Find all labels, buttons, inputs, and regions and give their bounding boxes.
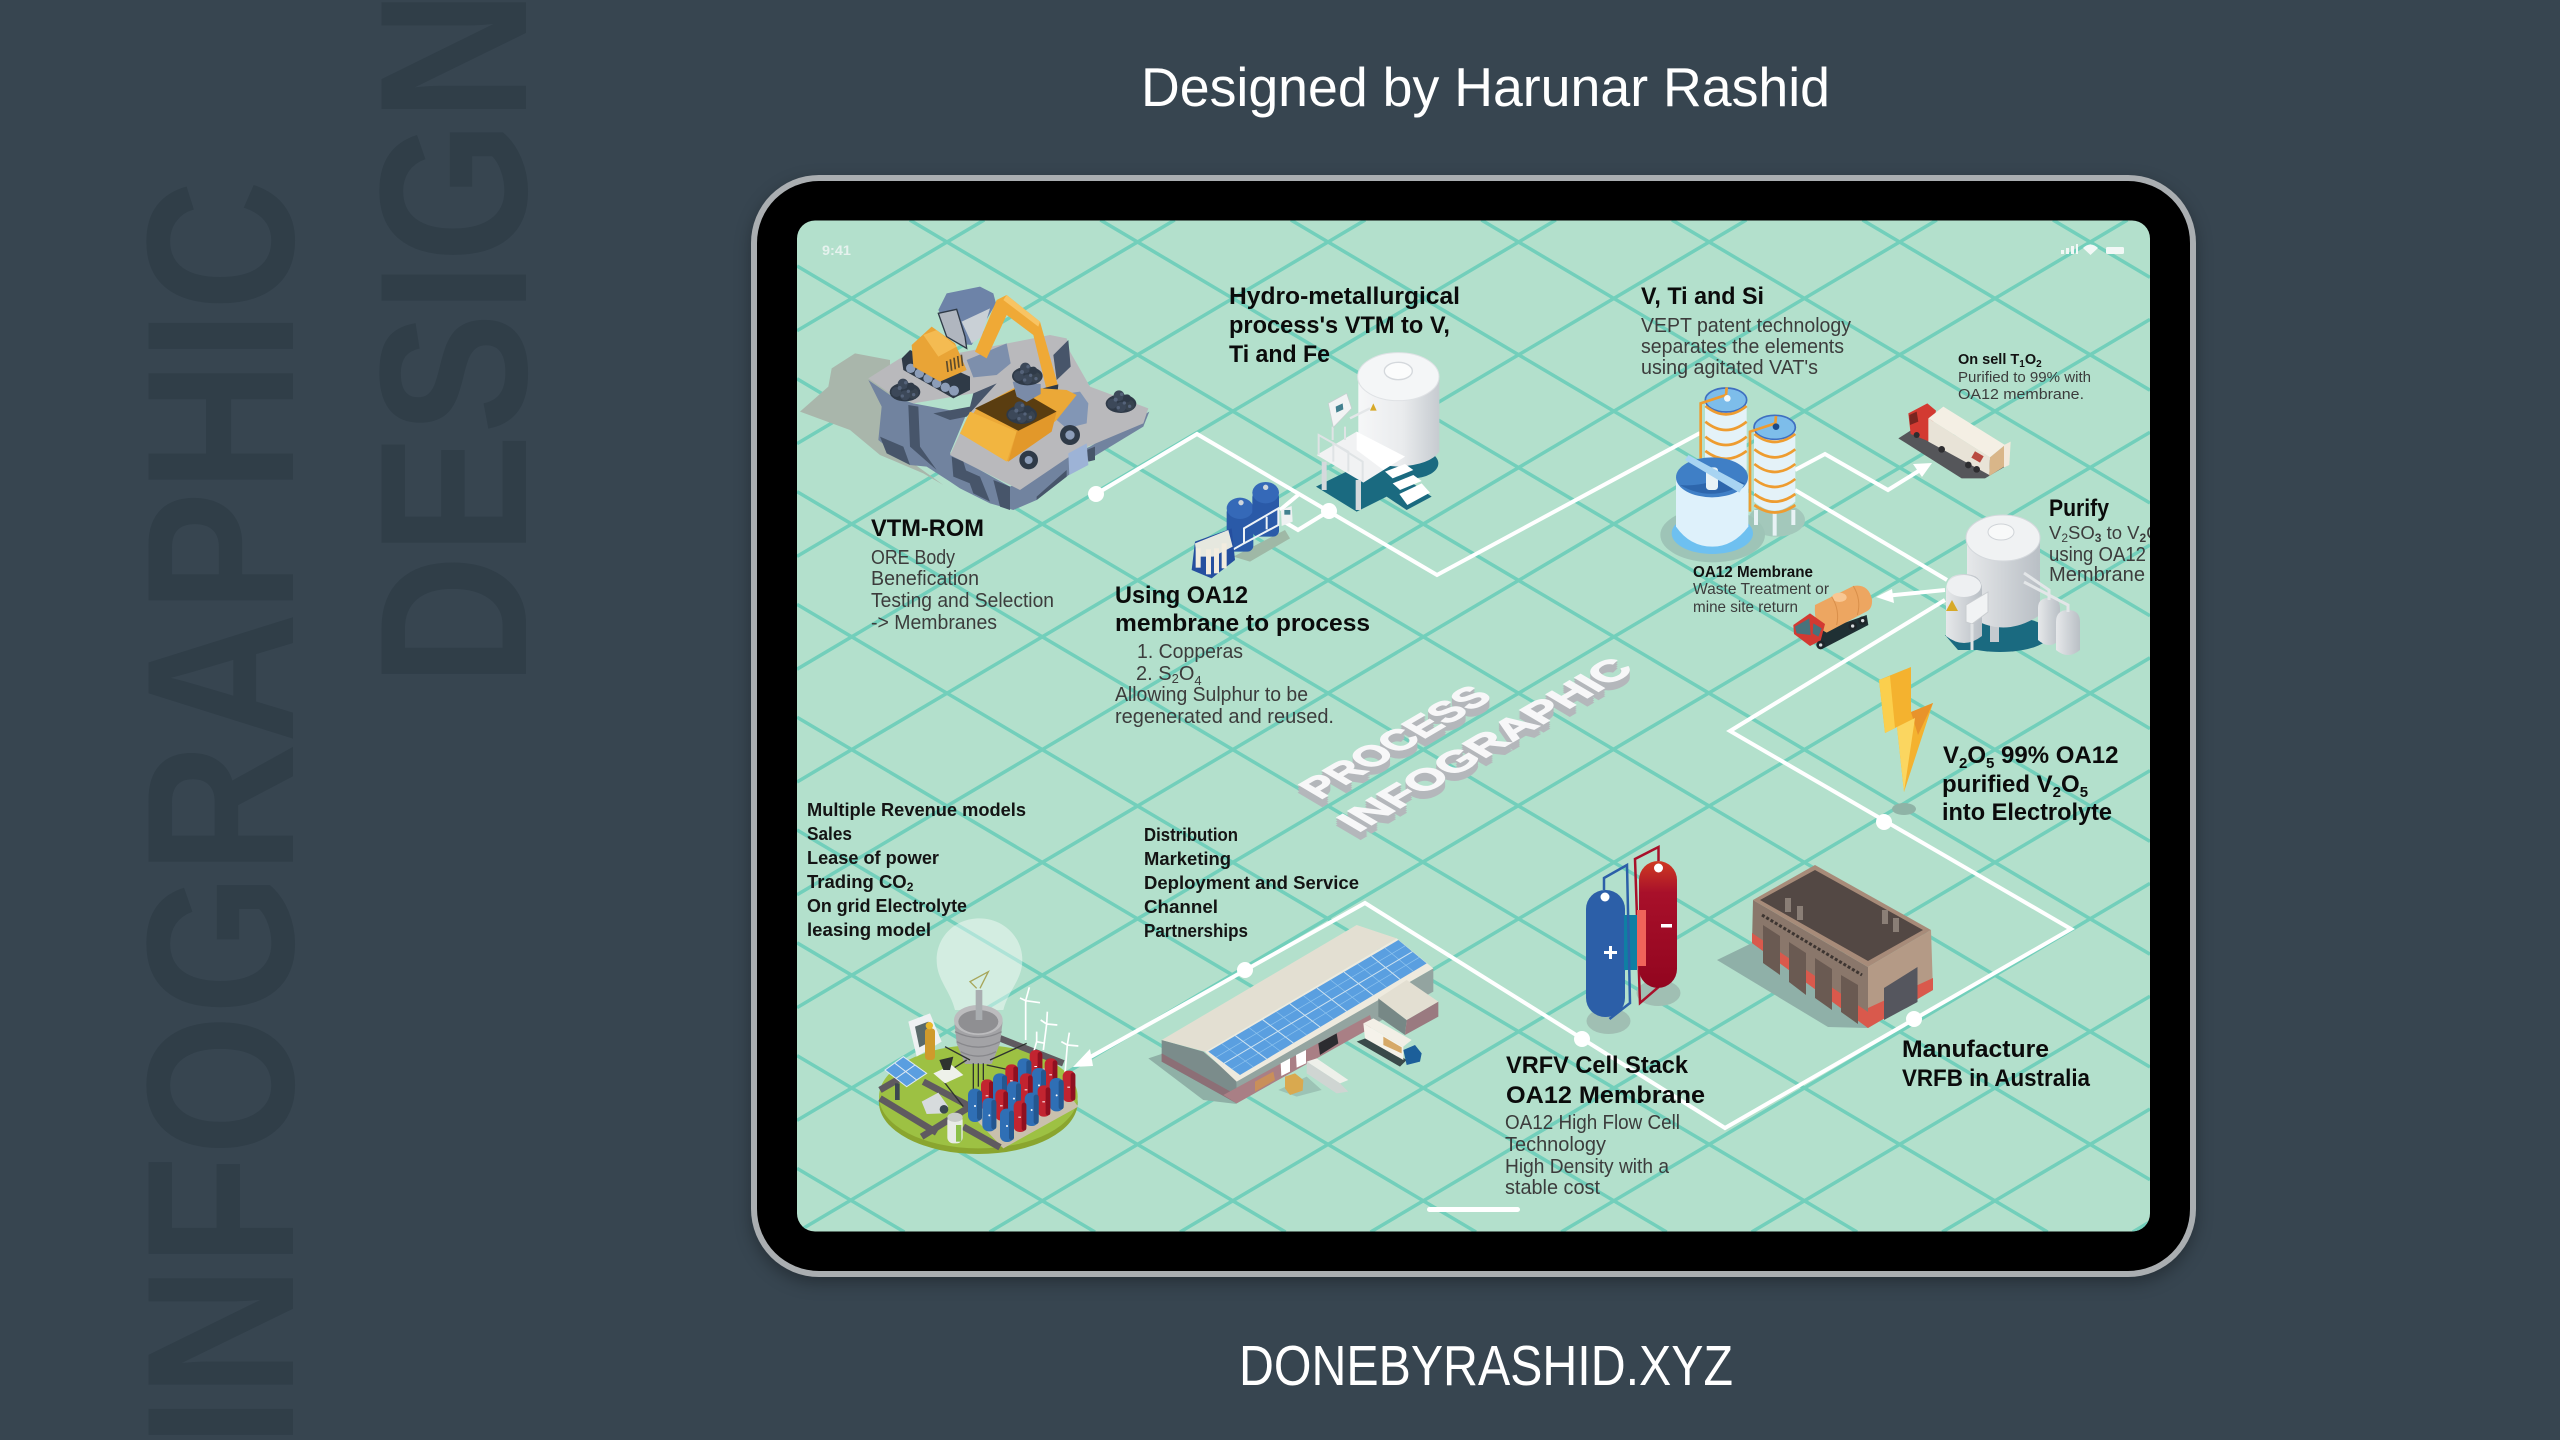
label: distribution list: Deployment and Service: [1144, 872, 1359, 893]
watermark: INFOGRAPHIC vertical: INFOGRAPHIC: [103, 180, 338, 1440]
label: revenue models: Multiple Revenue models: [807, 799, 1026, 820]
label: V2O5 electrolyte: 5: [2080, 784, 2088, 801]
label: V, Ti and Si: [1641, 283, 1851, 379]
label: VTM-ROM: Benefication: [871, 568, 979, 590]
label: purify: 2: [2140, 531, 2147, 545]
status bar time: 9:41: [822, 242, 851, 258]
label: distribution list: Channel: [1144, 896, 1218, 917]
label: revenue models: Sales: [807, 823, 852, 844]
icon: VRFB cell stack: [1586, 847, 1680, 1034]
label: on sell TiO2: On sell T: [1958, 352, 2019, 368]
3D title: PROCESS INFOGRAPHIC: [1290, 652, 1643, 838]
label: hydro-metallurgical: process's VTM to V,: [1229, 312, 1450, 339]
label: using OA12 membrane: Using OA12: [1115, 582, 1248, 609]
label: V2O5 electrolyte: 2: [1959, 755, 1967, 772]
label: purify: Membrane: [2049, 564, 2145, 586]
label: manufacture: VRFB in Australia: [1902, 1065, 2091, 1092]
label: using OA12 membrane: 4: [1194, 673, 1202, 688]
label: V, Ti and Si: using agitated VAT's: [1641, 357, 1818, 379]
label: VTM-ROM: -> Membranes: [871, 612, 997, 634]
label: revenue models: 2: [907, 880, 914, 894]
label: using OA12 membrane: [1115, 582, 1370, 728]
home indicator: [1427, 1207, 1520, 1212]
label: hydro-metallurgical: Hydro-metallurgical: [1229, 283, 1460, 310]
label: VRFV cell stack: [1505, 1052, 1705, 1199]
label: on sell TiO2: O: [2025, 352, 2036, 368]
label: purify: 2: [2061, 531, 2068, 545]
title: Designed by Harunar Rashid: [1141, 56, 1830, 118]
label: on sell TiO2: 2: [2036, 359, 2042, 370]
label: purify: V: [2049, 522, 2061, 543]
label: OA12 membrane waste: Waste Treatment or: [1693, 581, 1830, 598]
label: purify: O: [2146, 522, 2161, 543]
icon: manufacturing building: [1717, 865, 1933, 1028]
label: VTM-ROM: ORE Body: [871, 547, 955, 569]
label: using OA12 membrane: O: [1179, 663, 1194, 685]
label: OA12 membrane waste: [1693, 566, 1829, 612]
label: hydro-metallurgical: Ti and Fe: [1229, 341, 1330, 368]
label: VRFV cell stack: VRFV Cell Stack: [1506, 1052, 1689, 1079]
label: V2O5 electrolyte: 99% OA12: [1994, 742, 2118, 769]
label: manufacture: Manufacture: [1902, 1036, 2049, 1063]
label: V, Ti and Si: V, Ti and Si: [1641, 283, 1764, 310]
3D title: PROCESS INFOGRAPHIC: INFOGRAPHIC: [1328, 652, 1643, 838]
process flow line with nodes and arrows: [1073, 433, 2071, 1128]
icon: lightning bolt: [1879, 667, 1933, 815]
icon: mine with excavator and dump truck: [800, 287, 1149, 510]
label: purify: using OA12: [2049, 544, 2146, 566]
label: using OA12 membrane: 1. Copperas: [1137, 641, 1243, 663]
label: VTM-ROM: VTM-ROM: [871, 515, 984, 542]
icon: hydro-metallurgical tank with platform: [1316, 353, 1439, 512]
tablet frame: [751, 175, 2196, 1277]
3D title: PROCESS INFOGRAPHIC: PROCESS: [1290, 680, 1502, 805]
label: V2O5 electrolyte: 2: [2053, 784, 2061, 801]
label: using OA12 membrane: membrane to process: [1115, 610, 1370, 637]
tablet screen infographic: [797, 220, 2161, 1232]
label: OA12 membrane waste: OA12 Membrane: [1693, 564, 1813, 581]
icon: warehouse with solar roof: [1148, 925, 1438, 1104]
label: distribution list: Marketing: [1144, 848, 1231, 869]
label: revenue models: Lease of power: [807, 847, 939, 868]
label: purify: to V: [2101, 522, 2140, 543]
label: V2O5 electrolyte: V: [1943, 742, 1959, 769]
label: V, Ti and Si: VEPT patent technology: [1641, 315, 1851, 337]
label: using OA12 membrane: regenerated and reused.: [1115, 706, 1334, 728]
icon: purify tanks: [1945, 515, 2080, 655]
label: purify: 3: [2095, 531, 2102, 545]
label: on sell TiO2: [1958, 353, 2090, 399]
label: on sell TiO2: 1: [2019, 359, 2025, 370]
label: VRFV cell stack: High Density with a: [1505, 1156, 1670, 1178]
label: purify: [2049, 498, 2150, 581]
label: revenue models: leasing model: [807, 919, 931, 940]
label: V2O5 electrolyte: O: [1967, 742, 1986, 769]
icon: TiO2 delivery truck: [1898, 403, 2011, 478]
label: VRFV cell stack: Technology: [1505, 1134, 1606, 1156]
label: on sell TiO2: Purified to 99% with: [1958, 369, 2091, 386]
status bar icons: [2061, 244, 2124, 255]
icon: waste tanker truck: [1793, 586, 1872, 649]
label: purify: SO: [2068, 522, 2095, 543]
label: V2O5 electrolyte: into Electrolyte: [1942, 799, 2112, 826]
label: VRFV cell stack: stable cost: [1505, 1177, 1600, 1199]
label: using OA12 membrane: 2: [1172, 671, 1179, 686]
label: V2O5 electrolyte: 5: [1986, 755, 1994, 772]
label: OA12 membrane waste: mine site return: [1693, 599, 1798, 616]
label: revenue models: On grid Electrolyte: [807, 895, 967, 916]
label: VTM-ROM: Testing and Selection: [871, 590, 1054, 612]
label: distribution list: [1144, 824, 1359, 941]
label: distribution list: Partnerships: [1144, 920, 1248, 941]
label: using OA12 membrane: Allowing Sulphur to be: [1115, 684, 1308, 706]
label: revenue models: [807, 799, 1026, 940]
website footer: DONEBYRASHID.XYZ: [1239, 1334, 1733, 1398]
label: VTM-ROM: [871, 515, 1054, 634]
label: VRFV cell stack: OA12 High Flow Cell: [1505, 1112, 1680, 1134]
label: distribution list: Distribution: [1144, 824, 1238, 845]
label: V, Ti and Si: separates the elements: [1641, 336, 1844, 358]
label: V2O5 electrolyte: [1942, 742, 2118, 826]
icon: OA12 membrane filtration unit: [1192, 482, 1293, 578]
label: VRFV cell stack: OA12 Membrane: [1506, 1082, 1705, 1109]
icon: agitated VAT and silos: [1660, 387, 1805, 562]
label: on sell TiO2: OA12 membrane.: [1958, 386, 2084, 403]
label: V2O5 electrolyte: purified V: [1942, 771, 2053, 798]
icon: light bulb smart grid with batteries: [879, 918, 1078, 1154]
label: using OA12 membrane: 2. S: [1136, 663, 1172, 685]
label: manufacture: [1902, 1040, 2090, 1086]
label: hydro-metallurgical: [1229, 286, 1458, 362]
label: revenue models: Trading CO: [807, 871, 907, 892]
page canvas: [146, 24, 2200, 1434]
label: purify: Purify: [2049, 495, 2110, 522]
label: V2O5 electrolyte: O: [2061, 771, 2080, 798]
